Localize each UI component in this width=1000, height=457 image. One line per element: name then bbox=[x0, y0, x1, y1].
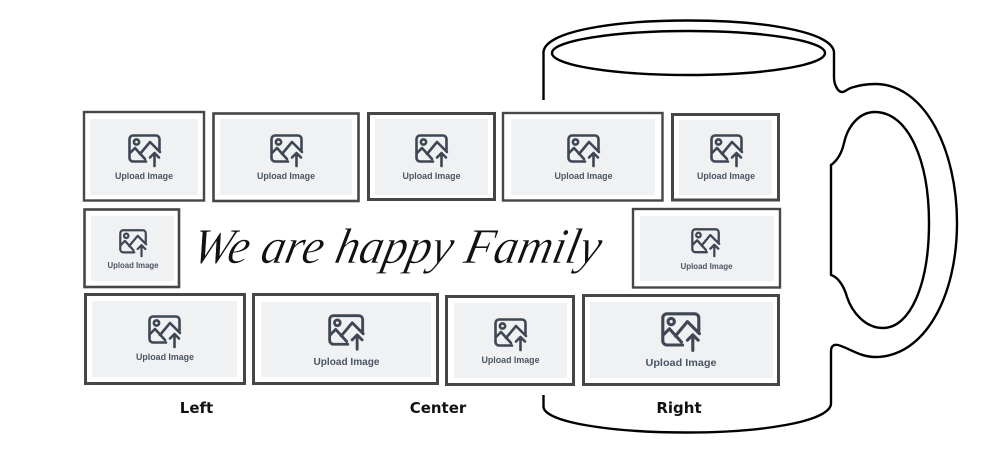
mug inner handle bbox=[831, 112, 929, 328]
upload slot 3 bbox=[368, 114, 494, 200]
upload slot 11: Upload Image bbox=[646, 357, 717, 369]
upload slot 2: Upload Image bbox=[257, 171, 315, 181]
script title: We are happy Family bbox=[188, 218, 608, 274]
upload slot 5: Upload Image bbox=[697, 171, 755, 181]
upload slot 4 bbox=[503, 113, 662, 200]
upload slot 1 bbox=[84, 112, 204, 200]
upload slot 7 bbox=[633, 209, 780, 288]
upload slot 8 bbox=[86, 294, 244, 384]
label: right: Right bbox=[656, 399, 702, 417]
upload slot 1: Upload Image bbox=[115, 171, 173, 181]
mug outline bbox=[544, 20, 957, 432]
upload slot 6: Upload Image bbox=[108, 261, 159, 270]
upload slot 9: Upload Image bbox=[314, 357, 380, 368]
label: center: Center bbox=[410, 399, 467, 417]
upload slot 6 bbox=[84, 210, 179, 287]
upload slot 11 bbox=[584, 296, 778, 384]
upload slot 5 bbox=[672, 114, 778, 200]
upload slot 4: Upload Image bbox=[554, 171, 612, 181]
upload slot 3: Upload Image bbox=[402, 171, 460, 181]
upload slot 9 bbox=[254, 294, 438, 384]
upload slot 2 bbox=[214, 114, 358, 201]
label: left: Left bbox=[180, 399, 213, 417]
upload slot 7: Upload Image bbox=[680, 262, 733, 271]
upload slot 10 bbox=[446, 296, 574, 384]
upload slot 8: Upload Image bbox=[136, 352, 194, 362]
mug opening bbox=[552, 31, 825, 75]
upload slot 10: Upload Image bbox=[482, 355, 540, 365]
